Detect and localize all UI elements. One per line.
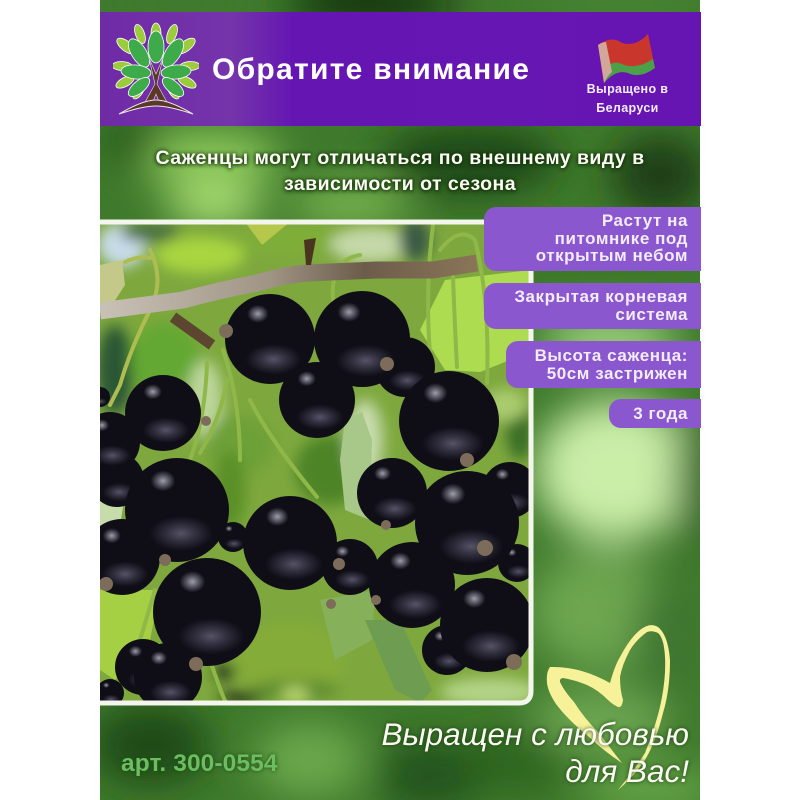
notice text: Саженцы могут отличаться по внешнему виду в xyxy=(155,147,645,169)
blurred foliage backdrop xyxy=(97,218,540,706)
slogan xyxy=(381,716,690,789)
feature tag: open field: питомнике под xyxy=(555,228,688,248)
text: grown in Belarus: Беларуси xyxy=(596,101,659,115)
feature tag: closed root system: система xyxy=(615,304,688,324)
notice text: зависимости от сезона xyxy=(284,173,516,195)
feature tag: age xyxy=(609,399,701,428)
stems xyxy=(110,225,488,703)
feature tag: open field: открытым небом xyxy=(536,246,688,265)
branch xyxy=(100,263,477,311)
feature tag: height xyxy=(506,341,701,388)
feature tag: open field xyxy=(484,207,701,271)
feature tag: closed root system: Закрытая корневая xyxy=(514,287,688,306)
text: grown in Belarus xyxy=(587,82,668,115)
header banner xyxy=(100,12,701,126)
berry calyx tips xyxy=(99,324,522,671)
photo frame xyxy=(100,222,531,703)
photo: blackcurrant berries xyxy=(100,220,534,706)
icon: Belarus flag xyxy=(598,34,655,83)
background: blurred green foliage xyxy=(100,0,700,800)
slogan: Выращен с любовью xyxy=(381,716,689,752)
heading: Обратите внимание xyxy=(212,53,530,86)
berries xyxy=(422,626,466,675)
feature tag: height: Высота саженца: xyxy=(535,346,688,365)
leaves xyxy=(247,224,287,245)
feature tag: closed root system xyxy=(484,283,701,329)
icon: tree logo xyxy=(113,22,199,114)
article number: арт. 300-0554 xyxy=(121,750,278,777)
feature tag: height: 50см застрижен xyxy=(547,364,688,382)
text: grown in Belarus: Выращено в xyxy=(587,82,668,96)
notice text xyxy=(152,147,645,195)
slogan: для Вас! xyxy=(565,753,689,789)
feature tag: age: 3 года xyxy=(633,404,688,423)
feature tag: open field: Растут на xyxy=(602,211,688,230)
icon: yellow heart xyxy=(546,625,670,790)
